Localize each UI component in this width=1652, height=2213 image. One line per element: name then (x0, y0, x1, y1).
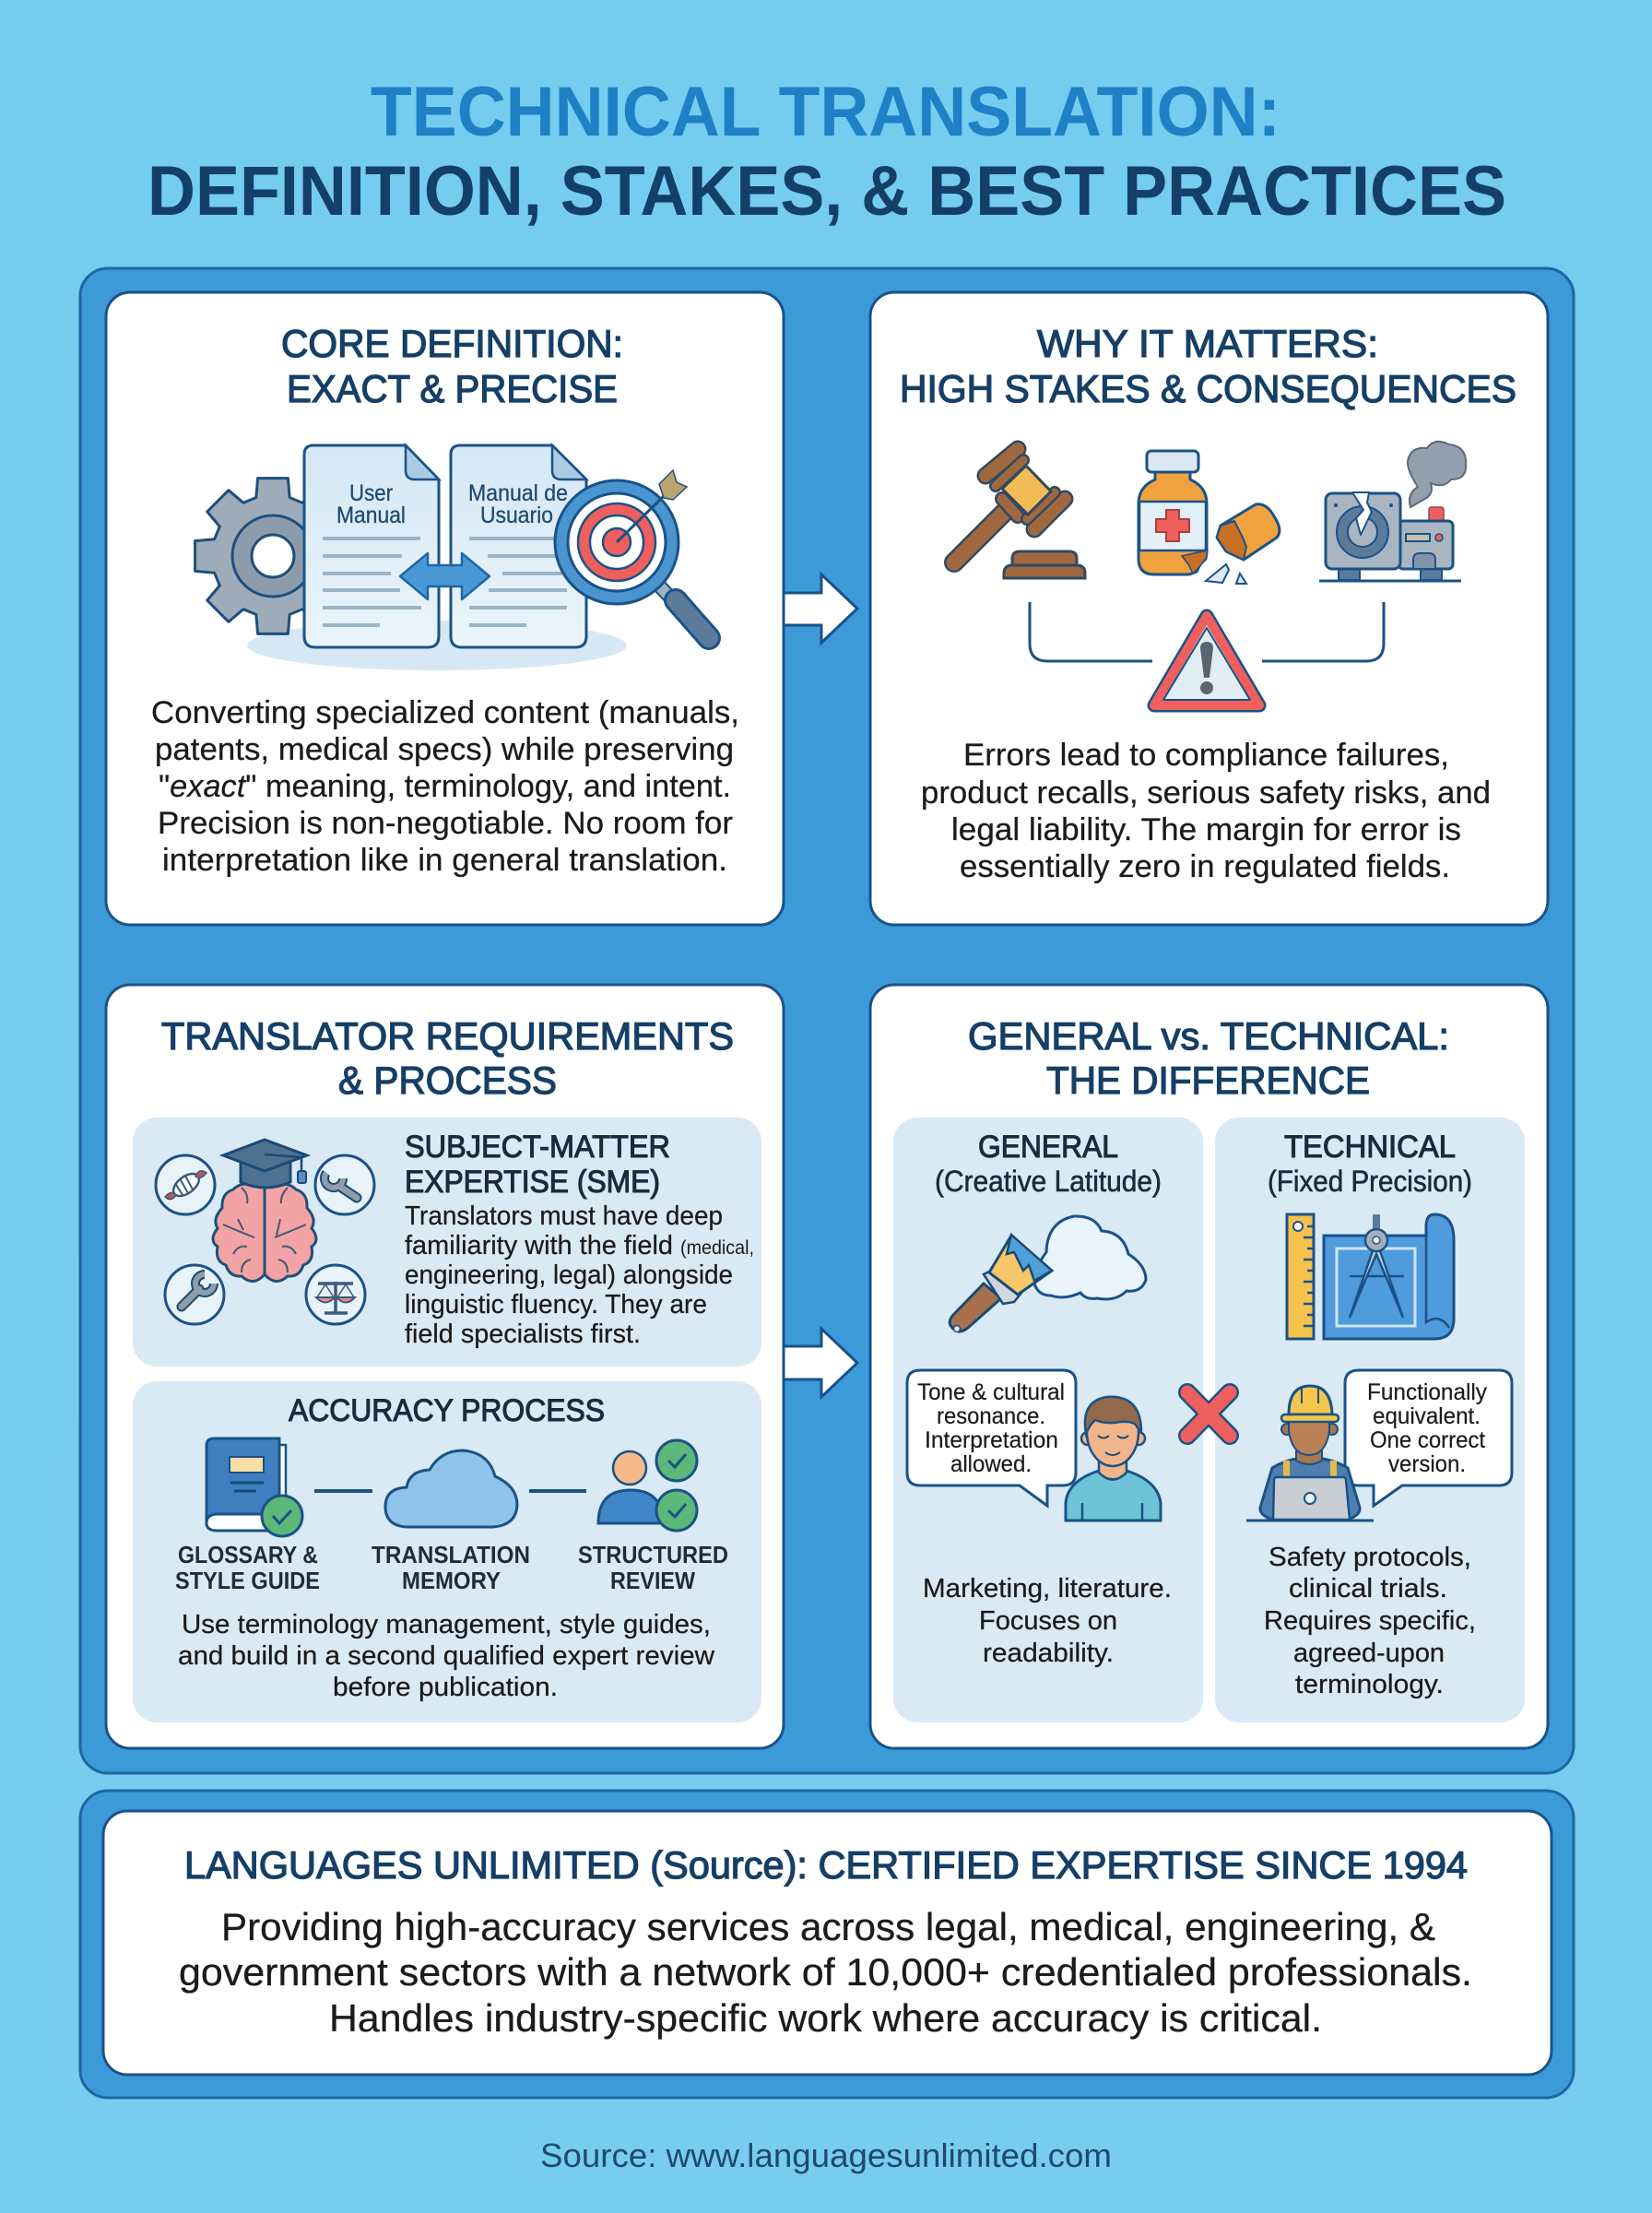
icon: brain with graduation cap (213, 1140, 316, 1282)
icon: red X (1187, 1392, 1230, 1436)
text: technical description (1264, 1543, 1476, 1699)
text: SME heading: SUBJECT-MATTER (405, 1130, 670, 1165)
panel: main container (80, 268, 1574, 1773)
callout: general: Interpretation (925, 1427, 1058, 1453)
panel: source container (80, 1791, 1574, 2098)
title: TECHNICAL TRANSLATION: (371, 73, 1280, 151)
icon: translation memory cloud (385, 1450, 517, 1527)
labels: process steps: REVIEW (610, 1567, 695, 1594)
callout: general (907, 1370, 1076, 1506)
text: accuracy body: before publication. (333, 1673, 558, 1702)
callout: general: Tone & cultural (917, 1379, 1065, 1405)
sub-panel: accuracy process (133, 1381, 761, 1722)
text: technical description: Safety protocols, (1268, 1543, 1471, 1572)
callout: technical: version. (1388, 1451, 1466, 1477)
body text: why it matters (921, 738, 1491, 884)
heading: translator requirements: & PROCESS (338, 1059, 557, 1102)
text: technical description: terminology. (1295, 1670, 1444, 1699)
heading: core definition (281, 322, 623, 410)
labels: process steps (175, 1541, 728, 1594)
icon: broken medicine bottle (1139, 451, 1280, 584)
panel: translator requirements (106, 985, 784, 1748)
icon: document Spanish (451, 445, 586, 647)
text: general description: readability. (983, 1639, 1114, 1668)
labels: process steps: GLOSSARY & (178, 1541, 318, 1568)
icon: double arrow (400, 553, 490, 599)
icon: magnifier with target (555, 470, 709, 638)
body text: core definition: Converting specialized content (manuals, (151, 695, 739, 730)
illustration: documents, gear and target (195, 445, 709, 670)
labels: process steps: MEMORY (402, 1567, 501, 1594)
heading: why it matters: WHY IT MATTERS: (1037, 322, 1378, 365)
heading: general vs technical: THE DIFFERENCE (1046, 1059, 1370, 1102)
icon: glossary book (206, 1438, 302, 1536)
icon: scales (306, 1265, 365, 1324)
body text: why it matters: legal liability. The margin for error is (951, 812, 1461, 847)
body text: core definition: interpretation like in general translation. (162, 843, 727, 878)
icon: document Spanish: Usuario (480, 503, 553, 528)
heading: languages unlimited: LANGUAGES UNLIMITED (Source): CERTIFIED EXPERTISE SINCE 1994 (184, 1843, 1468, 1887)
text: general heading (935, 1130, 1162, 1198)
icon: person (1066, 1397, 1161, 1521)
text: general description: Marketing, literature. (923, 1574, 1172, 1604)
heading: why it matters (900, 322, 1516, 410)
text: SME heading: EXPERTISE (SME) (405, 1165, 660, 1200)
icon: wrench top (315, 1155, 374, 1214)
icon: blueprint with compass (1324, 1214, 1454, 1339)
title (148, 73, 1506, 231)
text: SME body: engineering, legal) alongside (405, 1260, 733, 1290)
panel: why it matters (870, 292, 1548, 925)
text: technical description: agreed-upon (1293, 1639, 1445, 1668)
arrow: bottom cards (784, 1329, 857, 1397)
text: general heading: GENERAL (978, 1130, 1118, 1165)
title: DEFINITION, STAKES, & BEST PRACTICES (148, 152, 1506, 231)
text: technical heading: TECHNICAL (1284, 1130, 1456, 1165)
labels: process steps: TRANSLATION (372, 1541, 530, 1568)
body text: core definition: Precision is non-negotiable. No room for (158, 806, 733, 841)
heading: why it matters: HIGH STAKES & CONSEQUENCES (900, 367, 1516, 410)
column: general (893, 1118, 1203, 1722)
heading: translator requirements (161, 1014, 734, 1102)
column: technical (1215, 1118, 1525, 1722)
text: accuracy body: and build in a second qualified expert review (178, 1641, 715, 1671)
icon: wrench bottom (165, 1265, 224, 1324)
text: SME body: familiarity with the field (405, 1231, 673, 1260)
icon: DNA (156, 1155, 215, 1214)
text: languages unlimited body (179, 1905, 1472, 2040)
text: SME heading (405, 1130, 670, 1200)
text: technical description: Requires specific, (1264, 1606, 1476, 1636)
heading: core definition: CORE DEFINITION: (281, 322, 623, 365)
callout: general: allowed. (950, 1451, 1032, 1477)
icon: structured review people (598, 1440, 697, 1531)
labels: process steps: STYLE GUIDE (175, 1567, 320, 1594)
text: technical heading: (Fixed Precision) (1268, 1165, 1472, 1198)
text: SME body: field specialists first. (405, 1320, 641, 1349)
text: SME body: Translators must have deep (405, 1201, 723, 1231)
text: technical heading (1268, 1130, 1472, 1198)
heading: translator requirements: TRANSLATOR REQUIREMENTS (161, 1014, 734, 1058)
body text: core definition (151, 695, 739, 878)
text: languages unlimited body: government sectors with a network of 10,000+ credentialed professionals. (179, 1950, 1472, 1994)
text: general heading: (Creative Latitude) (935, 1165, 1162, 1198)
icon: ruler (1287, 1214, 1314, 1339)
panel: core definition (106, 292, 784, 925)
icon: engineer with laptop (1246, 1386, 1374, 1521)
body text: why it matters: Errors lead to compliance failures, (963, 738, 1449, 773)
icon: document English (304, 445, 439, 647)
text: languages unlimited body: Providing high-accuracy services across legal, medical, engineering, & (221, 1905, 1435, 1948)
body text: core definition: patents, medical specs) while preserving (155, 732, 734, 767)
text: general description: Focuses on (979, 1606, 1117, 1636)
body text: why it matters: essentially zero in regulated fields. (960, 849, 1450, 884)
body text: why it matters: product recalls, serious safety risks, and (921, 775, 1491, 811)
icon: document English: Manual (336, 503, 406, 528)
text: languages unlimited body: Handles industry-specific work where accuracy is critical. (329, 1996, 1322, 2040)
callout: technical: Functionally (1367, 1379, 1487, 1405)
icon: gavel (954, 449, 1085, 578)
text: accuracy body (178, 1610, 715, 1702)
panel: general vs technical (870, 985, 1548, 1748)
text: technical description: clinical trials. (1289, 1574, 1447, 1604)
callout: technical: equivalent. (1373, 1403, 1481, 1429)
callout: technical: One correct (1370, 1427, 1485, 1453)
callout: technical (1345, 1370, 1512, 1506)
icon: paintbrush (950, 1235, 1052, 1331)
icon: gear (195, 479, 350, 633)
icon: cloud (1034, 1216, 1146, 1299)
arrow: top cards (784, 574, 857, 643)
heading: general vs technical: GENERAL vs. TECHNICAL: (968, 1014, 1449, 1058)
text: SME body (405, 1201, 754, 1349)
callout: general: resonance. (937, 1403, 1045, 1429)
heading: core definition: EXACT & PRECISE (287, 367, 618, 410)
text: general description (923, 1574, 1172, 1668)
text: SME body: (medical, (680, 1237, 754, 1259)
icon: warning triangle (1154, 616, 1259, 705)
text: SME body: linguistic fluency. They are (405, 1290, 707, 1320)
body text: core definition: "exact" meaning, terminology, and intent. (159, 769, 731, 804)
icon: document English: User (349, 480, 393, 506)
icon: broken machine with smoke (1319, 442, 1466, 581)
source line: Source: www.languagesunlimited.com (540, 2136, 1112, 2174)
connector (529, 1489, 586, 1493)
labels: process steps: STRUCTURED (578, 1541, 728, 1568)
connector bracket (1030, 602, 1384, 661)
icon: document Spanish: Manual de (468, 480, 568, 506)
text: accuracy process heading: ACCURACY PROCESS (289, 1393, 605, 1428)
sub-panel: subject-matter expertise (133, 1118, 761, 1367)
connector (314, 1489, 372, 1493)
text: accuracy body: Use terminology management, style guides, (182, 1610, 711, 1639)
heading: general vs technical (968, 1014, 1449, 1102)
